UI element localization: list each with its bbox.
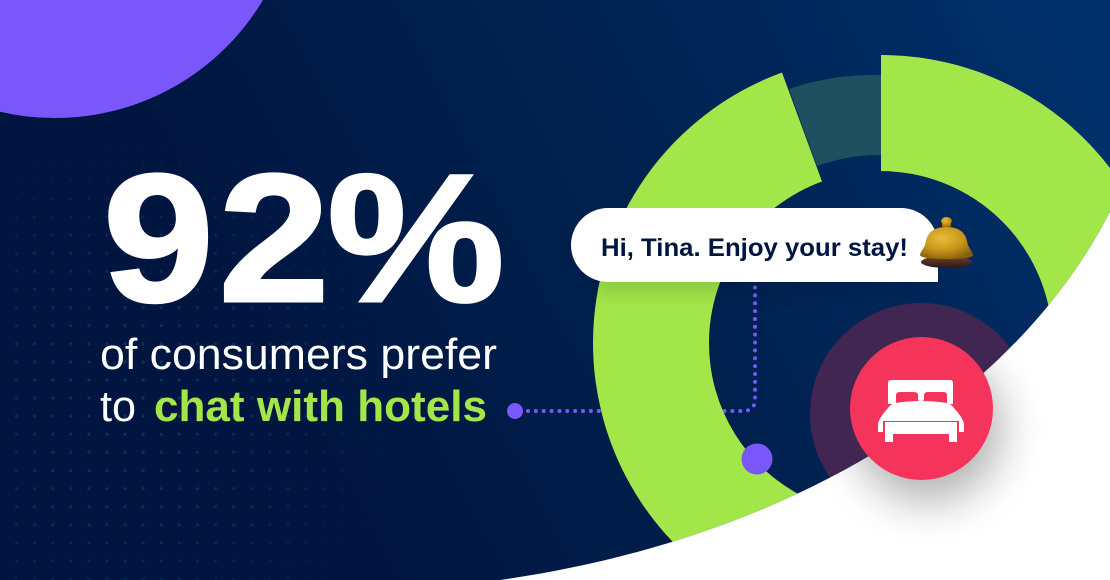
connector end dot [742,444,772,474]
icon: service bell [920,217,973,268]
icon: bed [878,380,964,442]
dot grid pattern [15,164,362,580]
purple circle top left [0,0,263,118]
chat bubble [571,208,938,282]
subheading line 2: chat with hotels [154,382,487,431]
headline: 92%: 92% [103,137,505,340]
donut chart [593,55,1110,579]
subheading line 1: of consumers prefer [100,330,497,379]
white curved corner [500,212,1110,580]
bed badge [850,337,993,480]
red circle [850,337,993,480]
subheading line 2: to [100,382,136,431]
chat bubble shadow [595,256,935,292]
dark purple halo circle [810,303,1010,478]
bubble text: Hi, Tina. Enjoy your stay! [601,234,908,262]
green segment right [881,55,1110,320]
dotted connector [528,284,755,411]
green segment left [593,72,822,579]
connector start dot [507,403,523,419]
shadow of bed badge [854,354,1002,502]
remaining ring segment [789,75,881,166]
